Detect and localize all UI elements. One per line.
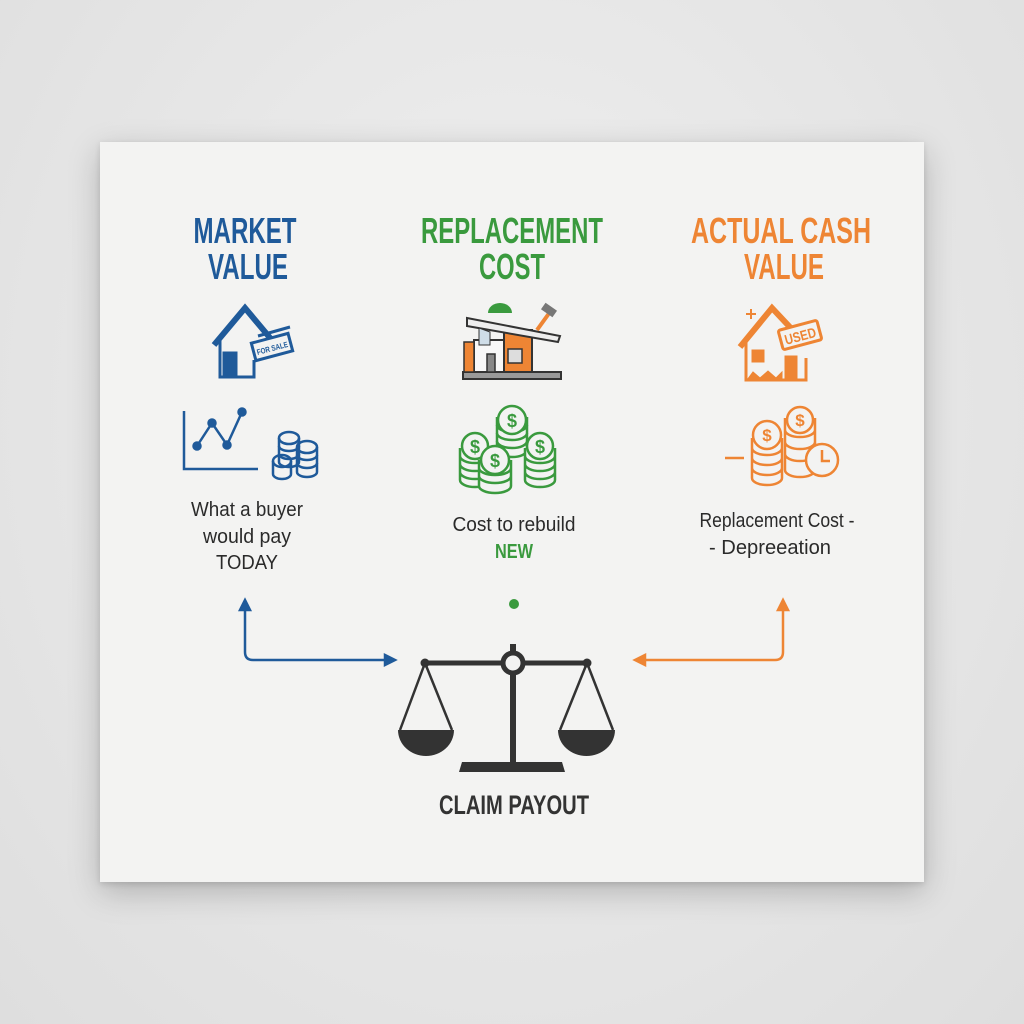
text: replacement cost description <box>452 514 576 563</box>
icon: green coin stacks: $ <box>490 451 500 471</box>
heading: actual cash value: VALUE <box>744 246 824 287</box>
arrow: actual cash value to scale <box>635 600 788 665</box>
icon: green dot <box>509 599 519 609</box>
icon: green coin stacks: $ <box>535 437 545 457</box>
text: actual cash value description <box>700 510 854 559</box>
text: market value description <box>191 499 303 574</box>
icon: house for sale: FOR SALE <box>256 340 290 357</box>
heading: replacement cost <box>421 210 603 287</box>
icon: house construction <box>463 303 561 379</box>
icon: orange coins minus clock: $ <box>795 411 805 430</box>
icon: green coin stacks: $ <box>507 411 517 431</box>
icon: orange coins minus clock: $ <box>762 426 772 445</box>
text: market value description: would pay <box>202 526 291 548</box>
icon: used house <box>740 308 822 380</box>
heading: replacement cost: COST <box>479 246 545 287</box>
icon: orange coins minus clock <box>725 407 838 485</box>
text: replacement cost description: NEW <box>495 541 533 563</box>
arrow: market value to scale <box>240 600 395 665</box>
heading: actual cash value <box>691 210 871 287</box>
title: claim payout: CLAIM PAYOUT <box>439 790 589 820</box>
icon: green coin stacks <box>460 406 555 493</box>
icon: used house: USED <box>783 324 818 348</box>
heading: market value: MARKET <box>194 210 297 251</box>
heading: actual cash value: ACTUAL CASH <box>691 210 871 251</box>
text: market value description: TODAY <box>216 552 278 574</box>
text: replacement cost description: Cost to rebuild <box>452 514 576 536</box>
text: actual cash value description: Replacement Cost - <box>700 510 854 532</box>
card panel <box>100 142 924 882</box>
heading: replacement cost: REPLACEMENT <box>421 210 603 251</box>
heading: market value: VALUE <box>208 246 288 287</box>
heading: market value <box>194 210 297 287</box>
text: actual cash value description: - Depreeation <box>709 537 831 559</box>
icon: scale <box>398 644 615 772</box>
icon: line chart with coins <box>184 408 317 479</box>
icon: house for sale <box>214 308 293 377</box>
icon: green coin stacks: $ <box>470 437 480 457</box>
text: market value description: What a buyer <box>191 499 303 521</box>
